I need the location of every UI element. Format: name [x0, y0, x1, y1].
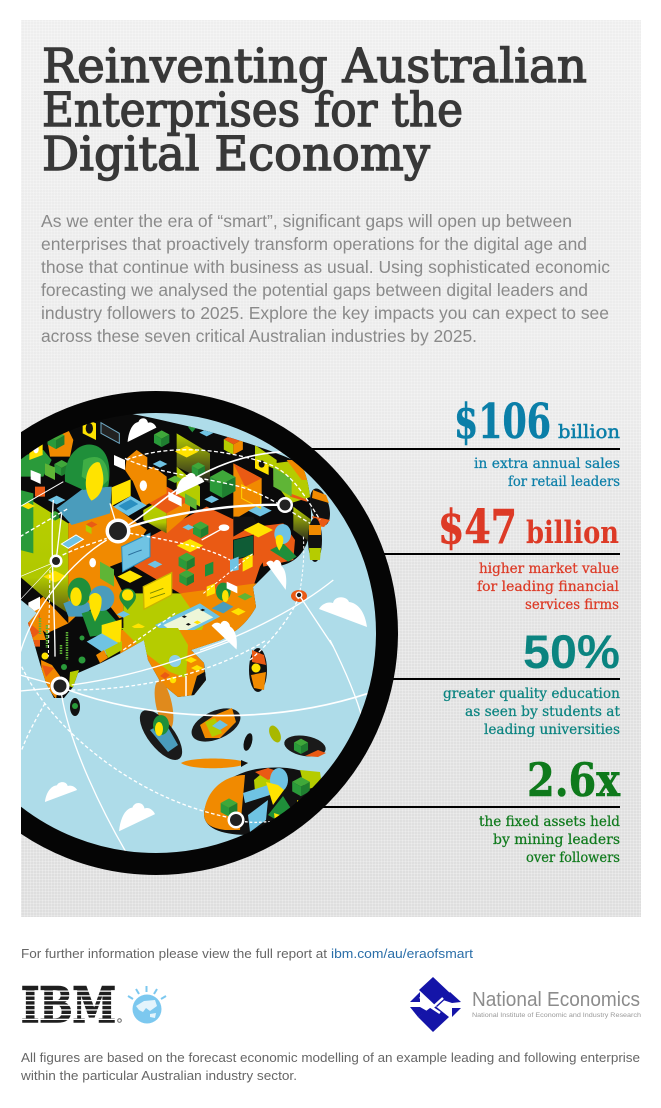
smarter planet globe icon — [128, 986, 166, 1024]
further information line: For further information please view the full report at — [21, 946, 327, 961]
footnote — [20, 1050, 640, 1083]
ocean — [0, 408, 381, 858]
people pair — [63, 600, 90, 617]
stat: education: as seen by students at — [465, 704, 621, 720]
main landmass city illustration — [21, 414, 311, 698]
stat: finance: services firms — [525, 597, 619, 613]
stat: retail: in extra annual sales — [474, 456, 620, 472]
intro paragraph: industry followers to 2025. Explore the key impacts you can expect to see — [41, 303, 609, 323]
further information line: ibm.com/au/eraofsmart — [331, 946, 473, 961]
footnote: within the particular Australian industry sector. — [20, 1068, 297, 1083]
lower island with person — [204, 768, 325, 835]
stat: education: 50% — [523, 625, 620, 678]
yellow and blue tiles — [177, 539, 203, 552]
stat: retail: $106 — [454, 394, 551, 450]
title: Enterprises for the — [42, 83, 463, 138]
stat: education: greater quality education — [443, 686, 620, 702]
intro paragraph: forecasting we analysed the potential gaps between digital leaders and — [41, 280, 588, 300]
title — [42, 39, 587, 182]
network nodes — [50, 497, 302, 828]
cubes — [48, 434, 64, 450]
stat: finance — [438, 500, 619, 613]
tablet — [155, 603, 220, 630]
intro paragraph: across these seven critical Australian industries by 2025. — [41, 326, 477, 346]
south lobe: lime and orange — [120, 628, 222, 700]
secondary land islands — [70, 486, 334, 835]
clouds — [45, 418, 367, 831]
chart cards — [122, 533, 150, 572]
small person right — [270, 543, 297, 562]
footnote: All figures are based on the forecast economic modelling of an example leading and following enterprise — [21, 1050, 640, 1065]
stat: retail: for retail leaders — [508, 474, 620, 490]
intro paragraph: those that continue with business as usual. Using sophisticated economic — [41, 257, 610, 277]
stat: retail — [454, 394, 620, 490]
title: Digital Economy — [42, 127, 430, 182]
yellow avatars — [82, 422, 96, 440]
stat: education — [443, 625, 621, 738]
globe black ring — [0, 402, 387, 864]
intro paragraph: As we enter the era of “smart”, significant gaps will open up between — [41, 211, 572, 231]
panel: textured background — [21, 20, 641, 917]
stat divider lines — [300, 448, 620, 808]
stat: mining: the fixed assets held — [479, 814, 620, 830]
stat: mining: over followers — [526, 850, 620, 866]
west lobe: black with orange and green details — [26, 613, 122, 699]
stat: finance: for leading financial — [477, 579, 619, 595]
map pins — [119, 588, 136, 610]
intro paragraph — [41, 211, 610, 346]
stat: mining — [479, 753, 620, 866]
network lines and nodes — [20, 450, 368, 853]
stat: finance: $47 — [438, 500, 517, 555]
large person — [57, 487, 112, 525]
stat: finance: higher market value — [479, 561, 619, 577]
National Economics logo: National Institute of Economic and Industry Research — [472, 1012, 641, 1019]
stat: retail: billion — [558, 421, 620, 443]
title: Reinventing Australian — [42, 39, 587, 94]
laptop — [112, 479, 131, 506]
stat: mining: 2.6x — [527, 753, 620, 807]
stat: finance: billion — [526, 515, 619, 551]
National Economics logo: National Economics — [472, 989, 640, 1011]
National Economics logo — [410, 977, 641, 1032]
stat: mining: by mining leaders — [493, 832, 620, 848]
further information line — [21, 946, 473, 961]
stat: education: leading universities — [484, 722, 620, 738]
globe illustration — [0, 400, 387, 864]
intro paragraph: enterprises that proactively transform operations for the digital age and — [41, 234, 587, 254]
IBM logo: IBM — [21, 976, 116, 1034]
laptop lower — [102, 619, 122, 643]
